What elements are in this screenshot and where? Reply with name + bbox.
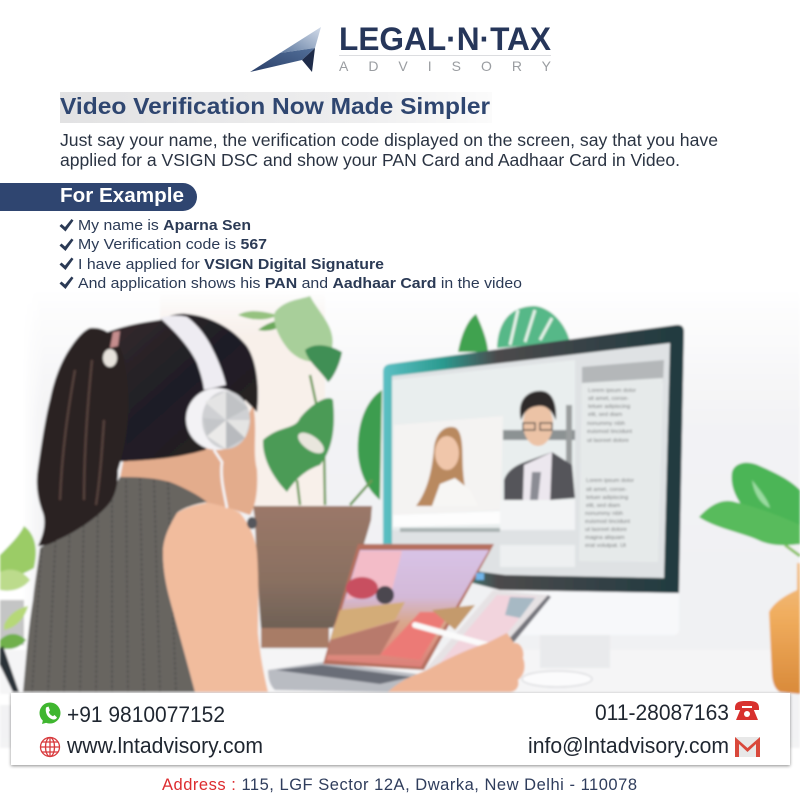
dark laptop edge at left — [0, 646, 19, 692]
headphone cable — [214, 450, 227, 508]
arm — [163, 503, 268, 692]
video call room backdrop — [392, 360, 575, 530]
monitor side text panel: elit, sed diam — [588, 412, 622, 418]
icon: telephone — [735, 701, 759, 720]
logo — [250, 21, 552, 74]
photo: woman on a video call at a desk — [0, 285, 800, 748]
monitor side text panel: tetuer adipiscing — [588, 404, 630, 410]
address line: Address : 115, LGF Sector 12A, Dwarka, New Delhi - 110078 — [162, 776, 637, 794]
white name bars — [393, 500, 575, 532]
laptop wallpaper details — [328, 551, 484, 660]
knit sleeveless top — [23, 477, 207, 692]
plant pot — [253, 506, 372, 648]
icon: whatsapp — [40, 702, 60, 724]
man on video call — [503, 391, 575, 530]
photo: desk surface — [0, 650, 800, 694]
logo mark — [250, 27, 321, 72]
icon: gmail — [735, 737, 760, 757]
ponytail highlights — [60, 360, 104, 505]
photo: window blinds — [160, 292, 325, 510]
for example banner — [0, 183, 197, 211]
intro paragraph: Just say your name, the verification code displayed on the screen, say that you have — [60, 130, 718, 150]
checklist item 2: My Verification code is 567 — [78, 236, 267, 253]
headphone band — [160, 316, 226, 390]
knit rib texture — [32, 478, 176, 692]
plant: large leaf left of monitor — [358, 390, 382, 500]
checklist item 4: And application shows his PAN and Aadhaar Card in the video — [78, 275, 522, 292]
monitor side text panel: Lorem ipsum dolor — [586, 478, 634, 484]
monitor bezel — [383, 325, 684, 593]
hand holding tablet — [388, 633, 525, 692]
monitor side text panel: erat volutpat. Ut — [585, 543, 626, 549]
monitor side text panel: euismod tincidunt — [585, 519, 631, 525]
monitor side text panel: magna aliquam — [585, 535, 625, 541]
laptop — [268, 544, 494, 692]
example checklist — [60, 217, 522, 292]
computer mouse — [522, 671, 592, 687]
email address: info@lntadvisory.com — [528, 733, 729, 758]
neck and face — [120, 405, 257, 515]
monitor chin and stand — [500, 588, 679, 668]
telephone number: 011-28087163 — [595, 700, 729, 725]
monitor side text panel: tetuer adipiscing — [586, 495, 628, 501]
monitor side text panel — [579, 360, 664, 562]
plant: right foliage — [699, 463, 800, 556]
intro paragraph: applied for a VSIGN DSC and show your PAN Card and Aadhaar Card in Video. — [60, 150, 680, 170]
contact panel background — [11, 693, 790, 765]
orange glass vase — [769, 563, 800, 694]
monitor side text panel: elit, sed diam — [586, 503, 620, 509]
monitor side text panel: nonummy nibh — [587, 421, 625, 427]
laptop keyboard — [276, 665, 412, 684]
laptop base — [268, 662, 425, 692]
wrist watch — [247, 517, 257, 529]
monitor side text panel: euismod tincidunt — [587, 429, 633, 435]
plant: potted monstera — [238, 296, 372, 505]
ponytail — [37, 328, 128, 546]
laptop screen frame — [323, 544, 494, 670]
woman on video call — [393, 416, 503, 515]
monitor side text panel: sit amet, conse- — [588, 396, 629, 402]
logo subtitle: ADVISORY — [339, 58, 552, 74]
laptop screen wallpaper — [326, 550, 489, 667]
intro paragraph — [60, 130, 718, 170]
contact panel — [11, 693, 790, 765]
logo wordmark: LEGAL·N·TAX — [339, 21, 552, 57]
plant: lower left foliage — [0, 526, 36, 649]
plant: leaves behind monitor — [458, 306, 570, 352]
monitor side text panel: nonummy nibh — [585, 511, 623, 517]
icon: globe — [40, 738, 60, 756]
for example banner: For Example — [60, 184, 184, 207]
monitor screen — [392, 343, 670, 578]
hair tie — [103, 331, 120, 367]
monitor side text panel: ut laoreet dolore — [585, 527, 627, 533]
whatsapp number: +91 9810077152 — [67, 702, 225, 727]
headphone ear cup — [186, 388, 250, 450]
monitor side text panel: sit amet, conse- — [586, 487, 627, 493]
woman — [23, 314, 268, 692]
monitor — [383, 325, 684, 668]
photo: wall backdrop — [0, 285, 800, 748]
stylus pen — [415, 625, 487, 645]
monitor side text panel: Lorem ipsum dolor — [588, 388, 636, 394]
photo: bright window column — [0, 285, 44, 705]
tablet — [423, 590, 551, 675]
website: www.lntadvisory.com — [66, 733, 263, 758]
heading: Video Verification Now Made Simpler — [60, 93, 490, 119]
checklist item 1: My name is Aparna Sen — [78, 217, 251, 234]
checklist item 3: I have applied for VSIGN Digital Signature — [78, 256, 384, 273]
translucent lower screen strip — [500, 545, 575, 567]
monitor side text panel: ut laoreet dolore — [587, 438, 629, 444]
hair back of head — [90, 314, 258, 462]
logo rule — [339, 55, 551, 56]
